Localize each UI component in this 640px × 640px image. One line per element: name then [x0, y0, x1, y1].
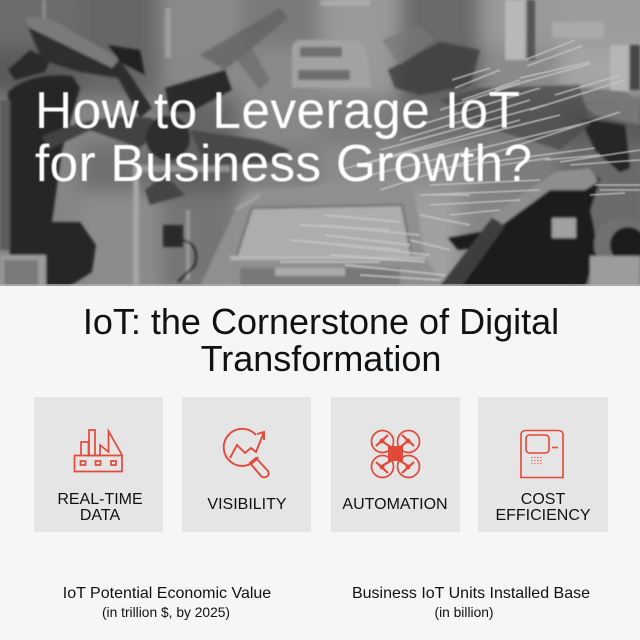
right robot arm — [440, 85, 640, 286]
sparks — [280, 40, 640, 280]
panel: cost efficiency — [478, 397, 608, 532]
hero photo: factory robots — [0, 0, 640, 292]
panel: real-time data — [34, 397, 163, 532]
label: automation: AUTOMATION — [342, 496, 448, 513]
panel: automation — [331, 397, 460, 532]
caption: economic value: (in trillion $, by 2025) — [102, 605, 230, 620]
panel: visibility — [182, 397, 311, 532]
label: visibility: VISIBILITY — [207, 496, 287, 513]
icon: drone — [372, 430, 420, 478]
caption: economic value: IoT Potential Economic Value — [63, 585, 271, 602]
label: cost efficiency: EFFICIENCY — [495, 507, 591, 524]
icon: magnifier with trend arrow — [224, 429, 269, 477]
section heading — [83, 301, 559, 379]
section heading: IoT: the Cornerstone of Digital — [83, 301, 559, 342]
background verticals and car bodies — [42, 0, 640, 286]
label: real-time data: REAL-TIME — [57, 491, 143, 508]
label: real-time data — [57, 491, 143, 524]
label: cost efficiency — [495, 491, 591, 524]
caption: installed base: (in billion) — [434, 605, 494, 620]
caption: installed base: Business IoT Units Installed Base — [352, 585, 590, 602]
label: real-time data: DATA — [80, 507, 120, 524]
left robot arm — [0, 17, 290, 286]
label: cost efficiency: COST — [521, 491, 565, 508]
section heading: Transformation — [201, 338, 441, 379]
caption: installed base — [352, 585, 590, 620]
icon: machine terminal — [520, 430, 564, 478]
title — [35, 81, 532, 192]
title: for Business Growth? — [35, 134, 532, 192]
title: How to Leverage IoT — [35, 81, 520, 139]
icon: factory — [74, 430, 122, 472]
caption: economic value — [63, 585, 271, 620]
